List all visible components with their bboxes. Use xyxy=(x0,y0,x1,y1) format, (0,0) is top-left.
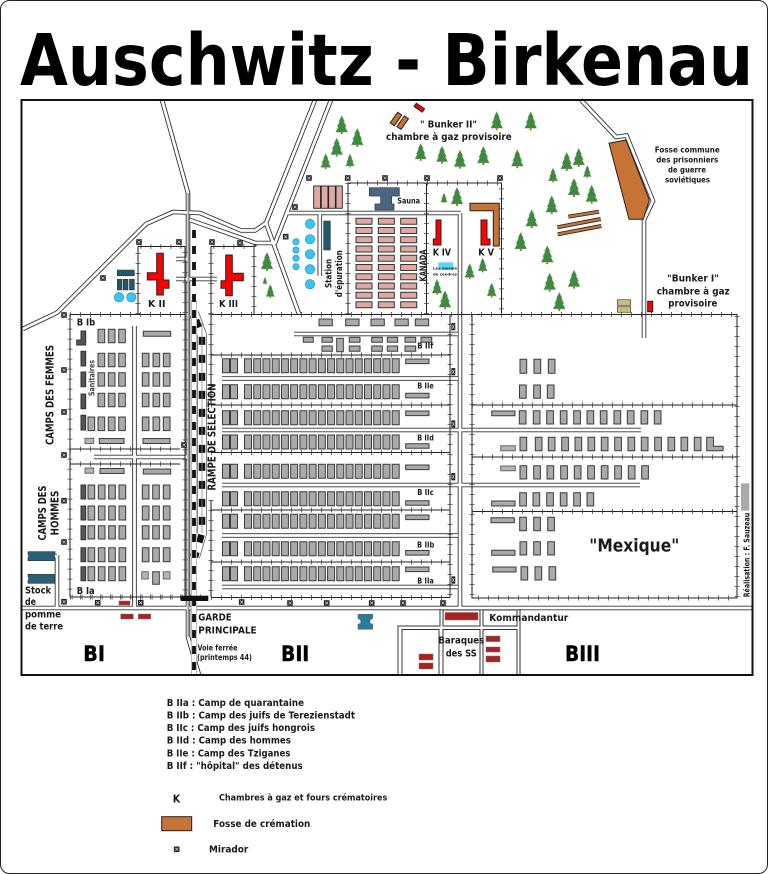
barracks: BIb women's camp xyxy=(77,329,171,444)
legend: watchtower key: Mirador xyxy=(209,845,249,856)
legend: sub-camps list: B IIe : Camp des Tziganes xyxy=(167,748,291,759)
legend: sub-camps list: B IIb : Camp des juifs de Terezienstadt xyxy=(167,710,355,721)
label: men's camp: CAMPS DES xyxy=(37,486,49,540)
legend: watchtower key xyxy=(174,845,249,856)
label: mass grave: de guerre xyxy=(668,166,706,175)
labels: BII sub-camps: B IId xyxy=(417,433,434,442)
cremation pit at K V xyxy=(470,203,499,246)
Kanada barracks xyxy=(356,218,417,308)
label: Bunker I xyxy=(657,274,730,310)
Bunker II buildings xyxy=(390,103,425,129)
barracks: BIa men's camp xyxy=(81,468,171,584)
potato storage hangars xyxy=(28,552,55,583)
labels: crematoria: K IV xyxy=(433,248,451,259)
map panel xyxy=(22,100,752,675)
barracks: BIIf hospital xyxy=(303,319,432,352)
label: Bunker II xyxy=(386,120,512,143)
fences xyxy=(70,183,737,598)
ash pond xyxy=(433,262,457,276)
label: main guard: GARDE xyxy=(198,613,232,624)
label: B Ib: B Ib xyxy=(77,318,95,329)
barracks: BII rows xyxy=(222,359,429,581)
label: men's camp xyxy=(37,486,62,540)
label: SS barracks xyxy=(438,635,484,660)
labels: crematoria: K III xyxy=(219,299,238,310)
main guard blue building xyxy=(358,614,373,629)
label: potato stock: de terre xyxy=(25,621,63,632)
sector labels: BIII xyxy=(565,642,600,666)
label: mass grave xyxy=(655,146,720,185)
legend: crematoria key: K xyxy=(173,793,181,805)
label: railway: Voie ferrée xyxy=(198,644,238,653)
label: Bunker I: chambre à gaz xyxy=(657,285,730,297)
label: Bunker I: provisoire xyxy=(668,299,717,310)
forest trees xyxy=(261,111,598,311)
sauna building xyxy=(369,188,399,210)
ash pond: de cendres xyxy=(433,272,457,276)
watchtowers xyxy=(61,175,503,606)
crematorium K V xyxy=(481,220,490,245)
barracks: BIII camp xyxy=(491,359,723,580)
label: Kanada: KANADA xyxy=(419,249,429,282)
label: sanitaires: Sanitaires xyxy=(88,360,96,396)
legend: crematoria key: Chambres à gaz et fours crématoires xyxy=(219,793,387,804)
legend: cremation pit key: Fosse de crémation xyxy=(213,819,311,830)
legend: sub-camps list xyxy=(167,698,355,772)
label: SS barracks: Baraques xyxy=(438,635,484,646)
labels: crematoria: K II xyxy=(148,299,166,310)
label: Station d'épuration xyxy=(324,250,345,297)
crematorium K III xyxy=(221,255,243,296)
label: Station d'épuration: d'épuration xyxy=(334,250,345,297)
legend: sub-camps list: B IId : Camp des hommes xyxy=(167,736,291,747)
labels: crematoria xyxy=(148,248,494,310)
purification station xyxy=(293,219,330,289)
crematorium K II with annexes xyxy=(114,253,169,302)
labels: BII sub-camps xyxy=(417,342,435,585)
legend: sub-camps list: B IIa : Camp de quarantaine xyxy=(167,698,304,709)
label: Kommandantur: Kommandantur xyxy=(489,613,568,624)
sector labels: BI xyxy=(83,642,105,666)
label: Station d'épuration: Station xyxy=(324,259,334,288)
red barracks near BI xyxy=(119,601,151,619)
label: women's camp: CAMPS DES FEMMES xyxy=(44,345,56,445)
label: B Ia: B Ia xyxy=(77,586,95,597)
labels: crematoria: K V xyxy=(478,248,494,259)
label: main guard: PRINCIPALE xyxy=(198,625,257,636)
labels: BII sub-camps: B IIa xyxy=(417,576,434,585)
label: potato stock: de xyxy=(25,597,36,608)
label: potato stock: pomme xyxy=(25,609,61,620)
label: railway: (printemps 44) xyxy=(197,653,252,662)
label: mass grave: Fosse commune xyxy=(655,146,720,155)
SS quarters and Kommandantur xyxy=(398,609,520,675)
sector labels xyxy=(83,642,600,666)
labels: BII sub-camps: B IIe xyxy=(417,381,434,390)
crematorium K IV xyxy=(433,220,441,245)
ash pond: Les marais xyxy=(433,266,457,270)
labels: BII sub-camps: B IIb xyxy=(417,541,435,550)
labels: BII sub-camps: B IIf xyxy=(417,342,434,351)
legend: sub-camps list: B IIf : "hôpital" des détenus xyxy=(167,761,303,772)
selection ramp and railway xyxy=(181,230,208,675)
label: potato stock: Stock xyxy=(25,585,51,596)
label: mass grave: soviétiques xyxy=(665,175,710,185)
credit with licence badge: Réalisation : F. Sauzeau xyxy=(742,513,751,597)
label: men's camp: HOMMES xyxy=(50,491,62,535)
labels: BII sub-camps: B IIc xyxy=(417,488,434,497)
Bunker I buildings xyxy=(617,300,653,312)
label: SS barracks: des SS xyxy=(446,649,477,660)
legend: sub-camps list: B IIc : Camp des juifs hongrois xyxy=(167,723,315,734)
map frame xyxy=(22,100,752,675)
label: Mexique: "Mexique" xyxy=(589,536,679,557)
roads xyxy=(22,100,752,675)
label: Bunker II: " Bunker II" xyxy=(420,120,477,131)
label: Sauna: Sauna xyxy=(397,196,420,205)
legend: cremation pit key xyxy=(162,817,311,831)
pink block near sauna xyxy=(314,186,342,208)
label: potato stock xyxy=(25,585,63,632)
cremation pits in forest xyxy=(557,212,601,234)
label: main guard xyxy=(198,613,257,636)
label: railway xyxy=(197,644,252,662)
sector labels: BII xyxy=(281,642,309,666)
mass grave of Soviet prisoners xyxy=(609,140,649,219)
label: Bunker II: chambre à gaz provisoire xyxy=(386,131,512,143)
label: mass grave: des prisonniers xyxy=(656,156,719,165)
label: Bunker I: "Bunker I" xyxy=(667,274,719,285)
legend: crematoria key xyxy=(173,793,387,805)
label: selection ramp: RAMPE DE SELECTION xyxy=(207,383,219,491)
